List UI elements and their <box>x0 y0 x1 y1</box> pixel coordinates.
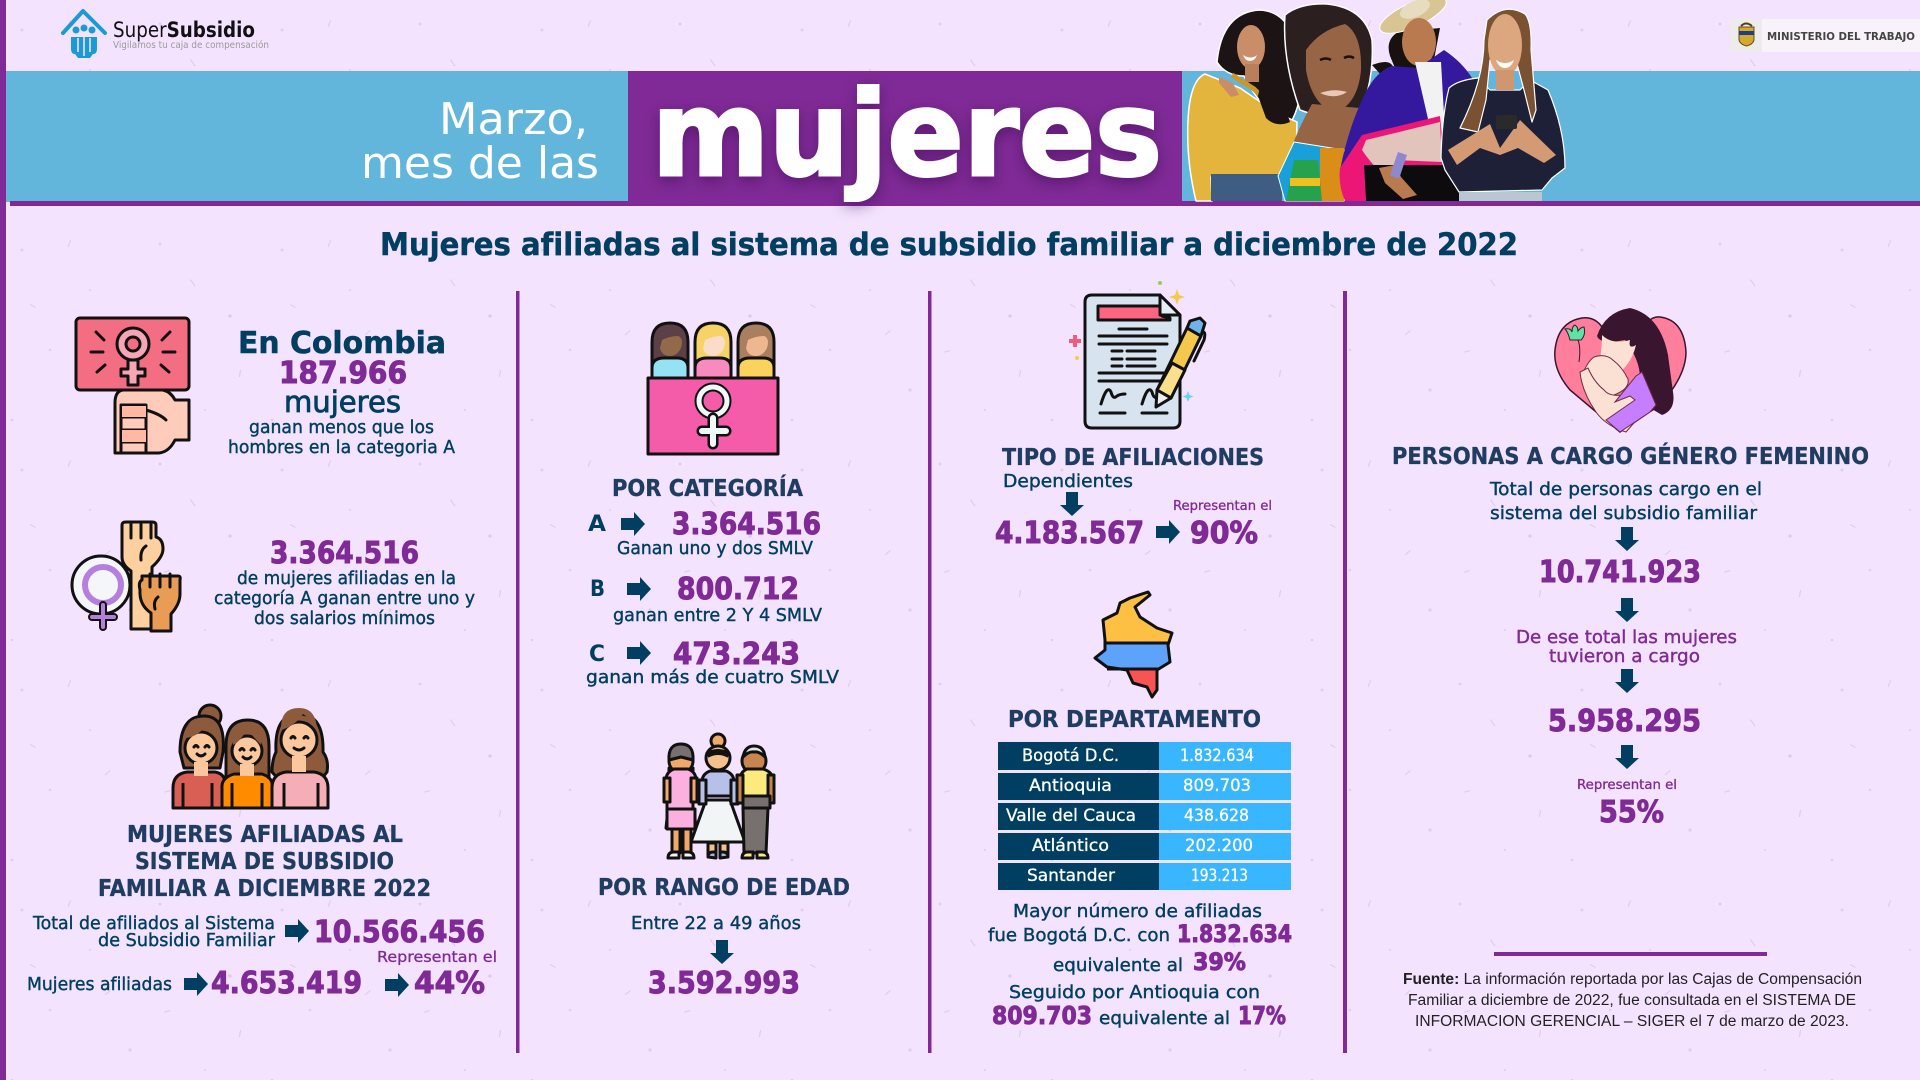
table: departamentos: Bogotá D.C. <box>1022 746 1119 766</box>
row: categoria A: Ganan uno y dos SMLV <box>617 538 814 559</box>
heading: En Colombia <box>228 326 456 458</box>
icon: raised fists with venus symbol <box>72 522 180 631</box>
source note <box>1403 952 1862 1030</box>
flow: personas a cargo: 10.741.923 <box>1539 555 1701 590</box>
icon: signed document and pen <box>1069 281 1205 428</box>
photo group: four women <box>1188 0 1565 201</box>
stat: categoria A: dos salarios mínimos <box>254 608 435 629</box>
row: categoria B: ganan entre 2 Y 4 SMLV <box>613 605 823 626</box>
heading: mujeres afiliadas: MUJERES AFILIADAS AL <box>127 822 403 848</box>
table: departamentos: 809.703 <box>1183 776 1251 796</box>
stat: rango de edad: Entre 22 a 49 años <box>631 913 801 934</box>
text block: Bogota and Antioquia summary: equivalente al <box>1099 1008 1230 1029</box>
flow: personas a cargo: 5.958.295 <box>1548 704 1701 739</box>
panel: column 1 <box>27 318 497 1001</box>
text block: Bogota and Antioquia summary <box>988 901 1292 1030</box>
stat: tipo de afiliaciones: 90% <box>1190 516 1258 551</box>
row: categoria B: B <box>590 577 605 602</box>
heading: personas a cargo: PERSONAS A CARGO GÉNERO FEMENINO <box>1392 442 1869 470</box>
logo: SuperSubsidio: Vigilamos tu caja de compensación <box>113 39 269 51</box>
heading: En Colombia: ganan menos que los <box>249 417 434 438</box>
table: departamentos: Atlántico <box>1032 836 1109 856</box>
stat: tipo de afiliaciones: Dependientes <box>1003 471 1133 492</box>
woman with phone <box>1441 9 1565 201</box>
row: categoria B: 800.712 <box>677 572 799 607</box>
icon: three people of different ages <box>664 734 774 858</box>
stat: total de afiliados: de Subsidio Familiar <box>98 930 276 951</box>
flow: personas a cargo: 55% <box>1599 795 1664 830</box>
heading: mujeres afiliadas: FAMILIAR A DICIEMBRE 2022 <box>98 876 431 902</box>
panel: column 2 <box>586 323 850 1001</box>
row: categoria A: A <box>588 512 606 537</box>
flow: personas a cargo: sistema del subsidio familiar <box>1490 503 1758 524</box>
row: categoria C <box>586 637 840 688</box>
banner title: mujeres <box>652 65 1162 203</box>
row: categoria C: 473.243 <box>673 637 800 672</box>
text block: Bogota and Antioquia summary: Seguido por Antioquia con <box>1009 982 1260 1003</box>
flow: personas a cargo: tuvieron a cargo <box>1549 646 1700 667</box>
logo: Ministerio del Trabajo <box>1730 19 1920 52</box>
source note: INFORMACION GERENCIAL – SIGER el 7 de marzo de 2023. <box>1415 1013 1849 1030</box>
table: departamentos: 202.200 <box>1185 836 1253 856</box>
stat: rango de edad <box>598 875 850 1001</box>
row: categoria C: ganan más de cuatro SMLV <box>586 667 840 688</box>
woman with blue cape and hat <box>1340 0 1472 201</box>
text block: Bogota and Antioquia summary: 39% <box>1193 948 1246 976</box>
banner title: mes de las <box>361 138 599 189</box>
source note: Familiar a diciembre de 2022, fue consultada en el SISTEMA DE <box>1408 992 1856 1009</box>
stat: categoria A: de mujeres afiliadas en la <box>237 568 456 589</box>
icon: three women behind a banner <box>648 323 778 454</box>
text block: Bogota and Antioquia summary: 17% <box>1238 1001 1286 1030</box>
stat: total de afiliados <box>32 913 485 951</box>
text block: Bogota and Antioquia summary: equivalente al <box>1053 955 1183 976</box>
banner band <box>6 71 1920 206</box>
stat: mujeres afiliadas <box>27 948 497 1001</box>
stat: tipo de afiliaciones <box>995 445 1272 551</box>
flow: personas a cargo <box>1489 479 1762 830</box>
row: categoria A: 3.364.516 <box>672 507 821 542</box>
row: categoria A <box>588 507 821 559</box>
stat: categoria A: 3.364.516 <box>270 536 419 571</box>
logo: SuperSubsidio: SuperSubsidio <box>113 18 255 42</box>
table: departamentos: 1.832.634 <box>1180 746 1254 766</box>
stat: mujeres afiliadas: Representan el <box>377 948 497 966</box>
icon: protest sign with fist <box>76 318 189 453</box>
heading: En Colombia: mujeres <box>284 385 401 419</box>
stat: tipo de afiliaciones: TIPO DE AFILIACIONES <box>1002 445 1264 471</box>
panel: column 3 <box>988 281 1292 1030</box>
panel: column 4 <box>1392 308 1869 1030</box>
text block: Bogota and Antioquia summary: Mayor número de afiliadas <box>1013 901 1262 922</box>
logo: SuperSubsidio <box>63 11 269 58</box>
flow: personas a cargo: De ese total las mujeres <box>1516 627 1737 648</box>
text block: Bogota and Antioquia summary: 809.703 <box>992 1001 1092 1030</box>
stat: rango de edad: POR RANGO DE EDAD <box>598 875 850 901</box>
stat: tipo de afiliaciones: Representan el <box>1173 499 1272 514</box>
heading: En Colombia: hombres en la categoria A <box>228 437 456 458</box>
row: categoria B <box>590 572 823 626</box>
icon: Colombia map <box>1093 590 1174 699</box>
table: departamentos: 438.628 <box>1184 806 1249 826</box>
table: departamentos: 193.213 <box>1191 866 1248 886</box>
table: departamentos: Antioquia <box>1029 776 1112 796</box>
stat: mujeres afiliadas: 4.653.419 <box>211 966 362 1001</box>
banner title: Marzo, <box>439 94 588 145</box>
stat: total de afiliados: 10.566.456 <box>314 915 485 950</box>
stat: categoria A <box>214 536 475 629</box>
table: departamentos: Valle del Cauca <box>1006 806 1136 826</box>
flow: personas a cargo: Total de personas cargo en el <box>1489 479 1762 500</box>
woman with African print dress <box>1278 4 1372 201</box>
heading: mujeres afiliadas <box>98 822 431 902</box>
icon: three women <box>173 705 328 808</box>
stat: rango de edad: 3.592.993 <box>648 966 800 1001</box>
stat: mujeres afiliadas: 44% <box>414 966 485 1001</box>
title: Mujeres afiliadas al sistema de subsidio familiar a diciembre de 2022 <box>380 227 1518 263</box>
flow: personas a cargo: Representan el <box>1577 778 1677 793</box>
woman in yellow sweater <box>1188 10 1301 201</box>
table: departamentos: Santander <box>1027 866 1115 886</box>
banner title <box>361 65 1162 203</box>
heading: por categoria: POR CATEGORÍA <box>612 474 803 502</box>
heading: mujeres afiliadas: SISTEMA DE SUBSIDIO <box>135 849 394 875</box>
stat: categoria A: categoría A ganan entre uno y <box>214 588 475 609</box>
row: categoria C: C <box>589 642 605 667</box>
heading: por departamento: POR DEPARTAMENTO <box>1008 707 1261 733</box>
stat: mujeres afiliadas: Mujeres afiliadas <box>27 974 172 995</box>
heading: En Colombia: En Colombia <box>238 326 446 361</box>
icon: mother and baby in a heart <box>1555 308 1686 432</box>
stat: total de afiliados: Total de afiliados al Sistema <box>32 913 275 934</box>
text block: Bogota and Antioquia summary: 1.832.634 <box>1177 920 1292 948</box>
heading: En Colombia: 187.966 <box>279 356 407 391</box>
stat: tipo de afiliaciones: 4.183.567 <box>995 516 1144 551</box>
text block: Bogota and Antioquia summary: fue Bogotá D.C. con <box>988 925 1170 946</box>
source note: Fuente: La información reportada por las Cajas de Compensación <box>1403 971 1862 988</box>
table: departamentos <box>998 742 1291 890</box>
